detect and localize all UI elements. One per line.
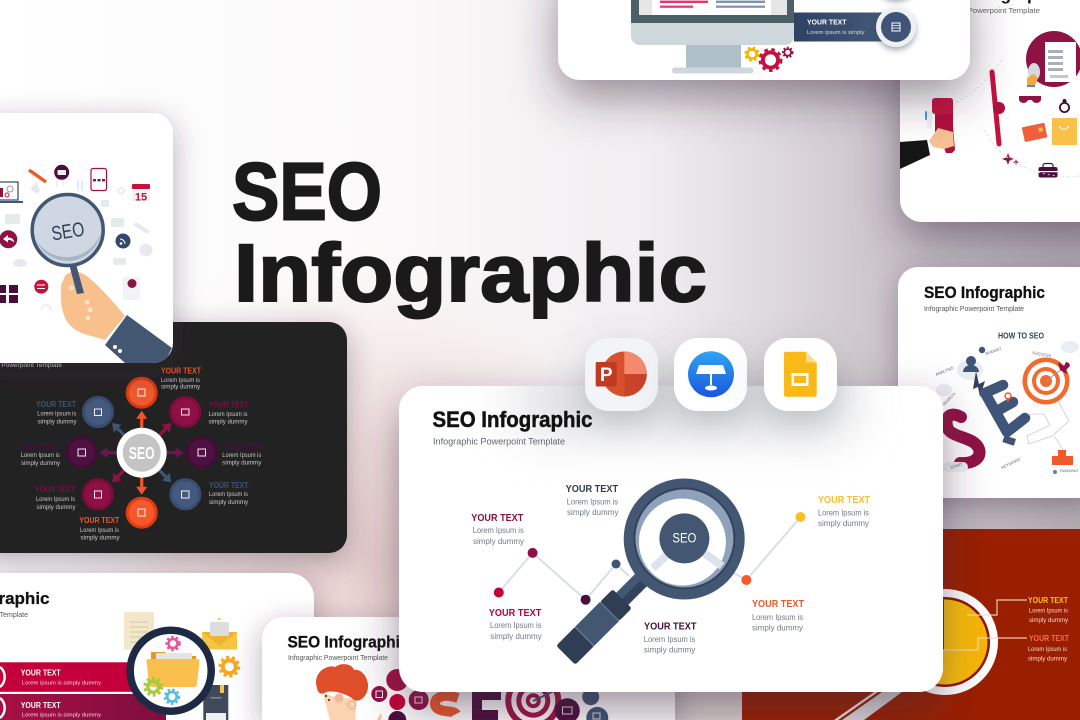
connector flow — [1027, 401, 1069, 450]
label: top — [161, 366, 201, 390]
bottom mid contents — [288, 632, 608, 720]
icon: start pill — [943, 462, 968, 472]
label: right: YOUR TEXT — [223, 442, 263, 451]
panel: dark radial slide — [0, 322, 347, 553]
label: crimson item — [471, 512, 524, 546]
icon: powerpoint tile — [585, 338, 658, 411]
faint icons — [5, 179, 152, 310]
heading: how to seo: HOW TO SEO — [998, 332, 1044, 340]
label: left — [20, 442, 60, 467]
icon: basket — [54, 165, 69, 180]
hub: seo: SEO — [129, 443, 155, 463]
label: red item — [489, 607, 542, 641]
icon: document — [123, 277, 140, 300]
label: yellow item — [1028, 597, 1068, 624]
label: right — [222, 442, 263, 466]
label: purple item: Lorem Ipsum is — [644, 635, 695, 644]
title — [232, 146, 707, 319]
big letter E — [472, 690, 501, 720]
label: yellow item: YOUR TEXT — [818, 494, 871, 506]
label: right: simply dummy — [222, 460, 261, 466]
label: bottom left — [35, 485, 76, 511]
panel: top monitor slide — [558, 0, 970, 80]
dark slide contents — [0, 362, 263, 542]
small labels: SEARCH — [941, 391, 957, 407]
icon: ranking dot — [1053, 470, 1057, 474]
label: top right — [208, 400, 249, 426]
label: top left: simply dummy — [38, 419, 76, 425]
node circles — [67, 378, 216, 527]
label: crimson item: simply dummy — [473, 537, 524, 546]
label: yellow item: simply dummy — [818, 519, 869, 528]
monitor — [631, 0, 794, 74]
panel: bottom mid slide — [262, 617, 675, 720]
panel: main slide — [399, 370, 943, 692]
label: purple item — [644, 621, 697, 655]
label: bottom: Lorem Ipsum is — [80, 528, 119, 534]
seo circle: SEO — [672, 530, 696, 546]
label: bottom right: simply dummy — [209, 500, 248, 506]
icon: rss — [116, 234, 130, 248]
icon: budget dot — [979, 347, 985, 353]
slide subtitle: Infographic Powerpoint Template — [288, 655, 388, 662]
panel: right mid slide — [898, 267, 1080, 498]
label: left: YOUR TEXT — [20, 442, 60, 451]
label: red item: simply dummy — [490, 632, 542, 641]
label: right: Lorem Ipsum is — [222, 453, 261, 459]
small labels: ANALYSIS — [935, 365, 955, 377]
label: bottom left: Lorem Ipsum is — [36, 497, 75, 503]
icon: pink gear — [167, 638, 179, 650]
icon: ranking podium — [1052, 450, 1073, 465]
dashed arcs — [952, 60, 1080, 176]
label: orange item: Lorem Ipsum is — [752, 613, 803, 622]
label: navy item: simply dummy — [567, 508, 618, 517]
icon: powerpoint tile: P — [600, 365, 613, 386]
icon: target — [1022, 358, 1070, 404]
icon: dartboard — [505, 673, 561, 720]
connector lines — [943, 600, 1027, 650]
icon: envelope — [202, 618, 237, 650]
label: top left: YOUR TEXT — [36, 400, 76, 409]
icon: paper — [124, 612, 154, 650]
label: top: simply dummy — [161, 384, 200, 390]
label: orange item: simply dummy — [1028, 656, 1067, 662]
label: orange item: YOUR TEXT — [1029, 633, 1070, 643]
label: red item: Lorem Ipsum is — [490, 621, 542, 630]
small labels — [935, 346, 1078, 473]
magnifier handle — [834, 692, 902, 720]
icon: folder — [146, 652, 200, 687]
label: bottom — [79, 516, 120, 542]
icon: reply — [0, 230, 17, 248]
lens lines — [653, 550, 722, 568]
small labels: START — [950, 461, 964, 470]
slide title: SEO Infographic — [924, 283, 1045, 302]
right mid slide contents — [924, 283, 1079, 474]
icon: clouds — [936, 341, 1079, 396]
icon: book — [203, 685, 228, 720]
letter S — [947, 415, 980, 463]
slide subtitle: Infographic Powerpoint Template — [924, 306, 1024, 313]
top right slide contents — [900, 0, 1080, 178]
label: top left — [36, 400, 76, 425]
yellow lens — [925, 589, 998, 695]
panel: top right slide — [900, 0, 1080, 222]
small labels: BUDGET — [985, 346, 1003, 356]
icon: laptop — [0, 182, 23, 203]
panel: left magnifier slide — [0, 113, 173, 363]
label: bottom right — [209, 481, 249, 506]
slide subtitle: Infographic Powerpoint Template — [927, 6, 1040, 15]
character illustration — [316, 664, 368, 720]
icon: shopping bag — [1052, 118, 1077, 145]
label: yellow item: Lorem Ipsum is — [1029, 608, 1068, 614]
icon: google slides tile — [764, 338, 837, 411]
small labels: RANKING — [1060, 468, 1078, 473]
label: top: Lorem Ipsum is — [161, 378, 200, 384]
label: crimson item: Lorem Ipsum is — [473, 526, 524, 535]
icon: magnifier with seo — [32, 194, 103, 294]
icon: sunglasses — [1019, 96, 1041, 103]
icon: orange gear — [220, 658, 238, 676]
circular icons — [371, 669, 429, 720]
icon: blue gear — [166, 690, 178, 703]
panel: red slide bottom right — [742, 529, 1080, 720]
icon: calendar: 15 — [135, 192, 147, 204]
icon: gift — [0, 285, 18, 303]
lens ring — [624, 478, 745, 600]
icon: magnifier with seo: SEO — [50, 219, 86, 245]
label: yellow item: YOUR TEXT — [1028, 595, 1069, 605]
bar: second row: Lorem ipsum is simply dummy — [22, 713, 101, 719]
title: Infographic — [234, 228, 707, 319]
label: yellow item — [818, 494, 871, 528]
icon: pencil — [29, 170, 46, 182]
label: top right: simply dummy — [208, 420, 248, 426]
label: purple item: YOUR TEXT — [644, 621, 697, 633]
labels — [20, 366, 263, 542]
label: orange item — [752, 598, 805, 633]
title: SEO — [232, 146, 382, 238]
icon: magnifier with folder — [130, 630, 211, 711]
icon: credit card — [1022, 123, 1047, 142]
hub: seo — [117, 428, 167, 478]
label: bottom left: simply dummy — [36, 505, 76, 511]
label: crimson item: YOUR TEXT — [471, 512, 524, 524]
icon: map pin — [1005, 393, 1011, 403]
icon: order form — [1026, 31, 1080, 87]
slide title: SEO Infographic — [288, 632, 408, 652]
label: top right: YOUR TEXT — [208, 400, 249, 410]
icon: ring — [1060, 99, 1069, 112]
icon: document circle — [876, 7, 916, 47]
label: yellow item: simply dummy — [1029, 618, 1068, 624]
label: navy item: Lorem Ipsum is — [567, 498, 618, 507]
label: top right: Lorem Ipsum is — [208, 412, 248, 418]
bar: second row — [0, 694, 166, 720]
slide subtitle: Infographic Powerpoint Template — [433, 436, 565, 446]
label: orange item: simply dummy — [752, 624, 803, 633]
radial arrows — [100, 411, 184, 495]
bar: first row: YOUR TEXT — [21, 668, 61, 678]
letter E — [985, 385, 1025, 432]
label: purple item: simply dummy — [644, 646, 695, 655]
bar: first row — [0, 662, 150, 692]
label: top: YOUR TEXT — [161, 366, 201, 376]
label: orange item — [1028, 633, 1070, 662]
label: top left: Lorem Ipsum is — [37, 411, 76, 417]
icon: lightning — [973, 371, 985, 397]
small labels: KEYWORD — [1000, 457, 1021, 470]
label: orange item: YOUR TEXT — [752, 598, 805, 610]
small labels: SUCCESS — [1032, 350, 1052, 358]
label: navy item: YOUR TEXT — [566, 483, 619, 495]
left slide contents — [0, 165, 172, 372]
line chart — [494, 512, 806, 605]
label: bottom left: YOUR TEXT — [35, 485, 75, 494]
seo circle — [659, 513, 709, 563]
icon: sleeve — [105, 315, 172, 372]
icon: keynote tile — [674, 338, 747, 411]
big letter S — [435, 696, 458, 714]
magnifying glass — [556, 478, 745, 665]
icon: sparkles — [1002, 153, 1019, 165]
label: bottom right: Lorem Ipsum is — [209, 492, 248, 498]
icon: calendar — [132, 184, 150, 204]
icon: green gear — [145, 679, 161, 695]
callout bar: your text — [794, 12, 884, 42]
bar: first row: Lorem ipsum is simply dummy — [22, 680, 101, 686]
slide title: SEO Infographic — [432, 407, 592, 432]
circular icons right — [555, 688, 608, 720]
label: red item: YOUR TEXT — [489, 607, 542, 619]
label: bottom: YOUR TEXT — [79, 516, 120, 525]
label: left: Lorem Ipsum is — [21, 453, 60, 459]
icon: small folder — [1002, 435, 1016, 446]
top slide contents — [631, 0, 917, 74]
label: orange item: Lorem Ipsum is — [1028, 647, 1067, 653]
handle — [556, 567, 654, 665]
label: yellow item: Lorem Ipsum is — [818, 508, 869, 517]
label: bottom right: YOUR TEXT — [209, 481, 249, 490]
icon: user — [963, 356, 979, 372]
icon: sliders — [34, 280, 48, 294]
label: bottom: simply dummy — [80, 536, 120, 542]
label: navy item — [566, 483, 619, 517]
node icons — [78, 389, 206, 516]
icon: megaphone — [900, 72, 1005, 169]
bottom left contents — [0, 589, 238, 720]
icon: hand — [61, 271, 125, 340]
panel: bottom left slide — [0, 573, 314, 720]
icon: gears — [746, 48, 792, 70]
callout bar: your text: YOUR TEXT — [807, 18, 847, 26]
icon: phone — [91, 168, 106, 190]
label: left: simply dummy — [21, 461, 60, 467]
icon: briefcase — [1038, 164, 1058, 178]
callout bar: your text: Lorem ipsum is simply — [807, 30, 865, 36]
bar: second row: YOUR TEXT — [21, 701, 61, 710]
